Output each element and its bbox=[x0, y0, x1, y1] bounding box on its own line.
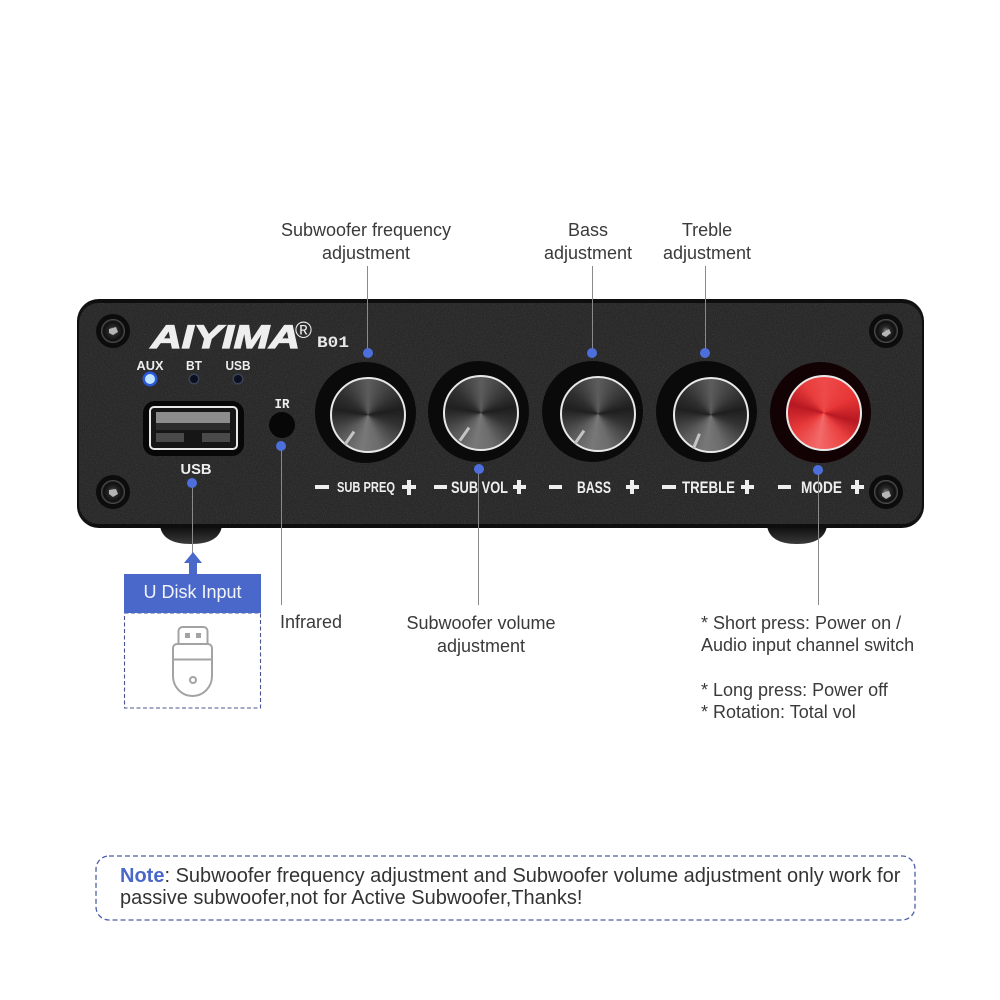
label: subwoofer volume adjustment: adjustment bbox=[437, 636, 525, 656]
model: B01: B01 bbox=[317, 334, 349, 352]
screw: bottom right bbox=[869, 475, 903, 509]
label: mode button functions: Audio input channel switch bbox=[701, 635, 914, 655]
foot: left bbox=[160, 526, 222, 544]
knob: mode (red) bbox=[770, 362, 871, 463]
label: BT: BT bbox=[186, 358, 202, 373]
label: treble adjustment bbox=[663, 220, 751, 263]
U Disk Input header: U Disk Input bbox=[143, 582, 242, 602]
label: treble adjustment: adjustment bbox=[663, 242, 751, 262]
label: subwoofer volume adjustment bbox=[406, 613, 556, 656]
label: USB port: USB bbox=[180, 461, 212, 478]
label: mode button functions: * Rotation: Total vol bbox=[701, 702, 856, 722]
foot: right bbox=[767, 526, 827, 544]
label: IR: IR bbox=[274, 397, 290, 413]
screw: bottom left bbox=[96, 475, 130, 509]
label: USB indicator: USB bbox=[226, 358, 250, 373]
USB port bbox=[143, 401, 244, 456]
knob legend: MODE: MODE bbox=[801, 478, 842, 497]
label: treble adjustment: Treble bbox=[682, 220, 732, 240]
label: bass adjustment: adjustment bbox=[544, 242, 632, 262]
note text: Note: Subwoofer frequency adjustment and Subwoofer volume adjustment only work for bbox=[120, 865, 900, 887]
logo: AIYIMA: AIYIMA bbox=[150, 319, 300, 355]
U disk dashed box bbox=[124, 613, 260, 708]
label: mode button functions: * Short press: Power on / bbox=[701, 613, 901, 633]
U Disk Input header bbox=[124, 574, 261, 613]
label: AUX: AUX bbox=[136, 358, 164, 373]
knob: sub frequency bbox=[315, 362, 416, 463]
panel body bbox=[77, 299, 924, 528]
screw: top right bbox=[869, 314, 903, 348]
label: bass adjustment: Bass bbox=[568, 220, 608, 240]
knob: treble bbox=[656, 361, 757, 462]
knob legend: TREBLE: TREBLE bbox=[682, 478, 735, 497]
logo: registered mark: ® bbox=[295, 317, 312, 343]
knob: sub volume bbox=[428, 361, 529, 462]
knob: bass bbox=[542, 361, 643, 462]
icon: USB stick bbox=[173, 627, 212, 696]
label: infrared: Infrared bbox=[280, 612, 342, 632]
callout dots bbox=[187, 348, 823, 488]
LED: BT bbox=[188, 374, 200, 384]
panel face bbox=[79, 303, 922, 524]
label: mode button functions: * Long press: Power off bbox=[701, 680, 888, 700]
LED: USB bbox=[232, 374, 244, 384]
infrared sensor bbox=[269, 412, 295, 438]
knob legend: MODE bbox=[778, 478, 864, 497]
knob legend: SUB PREQ: SUB PREQ bbox=[337, 479, 395, 496]
label: subwoofer frequency adjustment: adjustment bbox=[322, 242, 410, 262]
note text bbox=[120, 865, 900, 908]
note text: passive subwoofer,not for Active Subwoofer,Thanks! bbox=[120, 886, 582, 908]
LED: AUX bbox=[142, 372, 158, 386]
label: bass adjustment bbox=[544, 220, 632, 263]
label: subwoofer frequency adjustment bbox=[281, 220, 451, 263]
label: subwoofer volume adjustment: Subwoofer volume bbox=[406, 613, 556, 633]
label: subwoofer frequency adjustment: Subwoofer frequency bbox=[281, 220, 451, 240]
knob legend: BASS: BASS bbox=[577, 478, 611, 497]
note box outline bbox=[96, 856, 915, 920]
knob legend: BASS bbox=[549, 478, 639, 497]
arrow: into USB bbox=[184, 552, 202, 574]
knob legend: SUB VOL: SUB VOL bbox=[451, 478, 508, 497]
screw: top left bbox=[96, 314, 130, 348]
label: mode button functions bbox=[701, 613, 914, 722]
